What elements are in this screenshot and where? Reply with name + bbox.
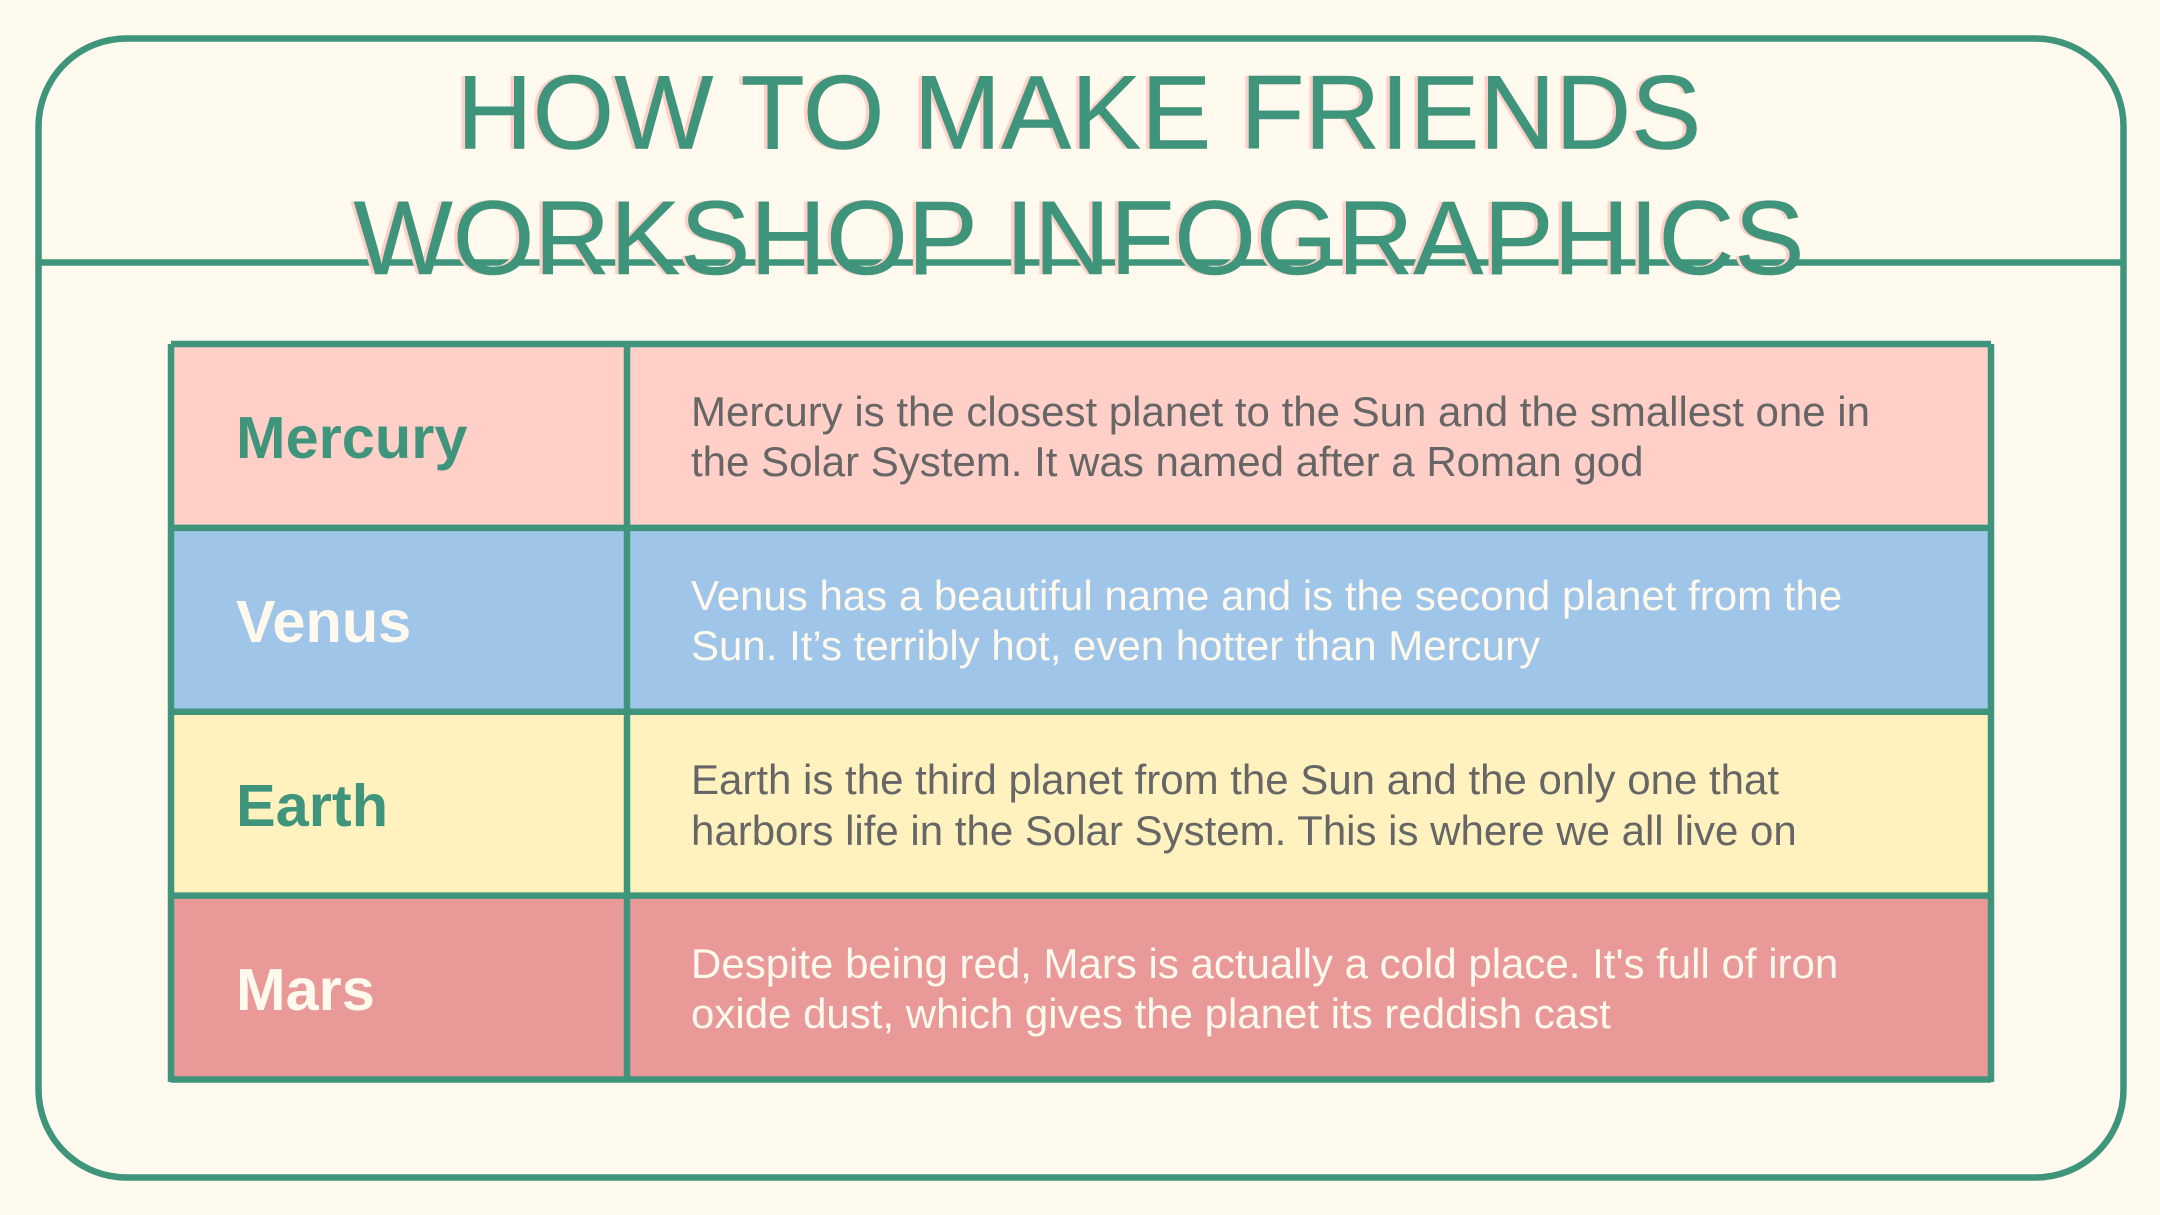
row: Mercury: Mercury is the closest planet to the Sun and the smallest one in	[691, 388, 1870, 435]
row: Venus	[171, 528, 1991, 712]
title	[350, 55, 1804, 297]
row: Earth: Earth is the third planet from the Sun and the only one that	[691, 756, 1779, 803]
row: Mars: Despite being red, Mars is actually a cold place. It's full of iron	[691, 940, 1838, 987]
row: Venus: Venus has a beautiful name and is the second planet from the	[691, 572, 1842, 619]
row: Earth	[171, 712, 1991, 896]
row: Mercury	[171, 344, 1991, 528]
table grid lines	[171, 344, 1991, 1082]
row: Mars	[171, 896, 1991, 1080]
title: HOW TO MAKE FRIENDS	[457, 55, 1701, 172]
row: Earth: Earth	[236, 772, 388, 839]
row: Mercury: Mercury	[236, 404, 468, 471]
table	[171, 344, 1991, 1082]
row: Mercury: the Solar System. It was named after a Roman god	[691, 438, 1643, 485]
row: Earth: harbors life in the Solar System. This is where we all live on	[691, 807, 1797, 854]
row: Venus: Venus	[236, 588, 411, 655]
title: WORKSHOP INFOGRAPHICS	[350, 180, 1801, 297]
row: Mars: oxide dust, which gives the planet its reddish cast	[691, 990, 1611, 1037]
row: Venus: Sun. It’s terribly hot, even hotter than Mercury	[691, 622, 1540, 669]
row: Mars: Mars	[236, 956, 375, 1023]
title: WORKSHOP INFOGRAPHICS	[354, 180, 1804, 297]
title: HOW TO MAKE FRIENDS	[453, 55, 1698, 172]
